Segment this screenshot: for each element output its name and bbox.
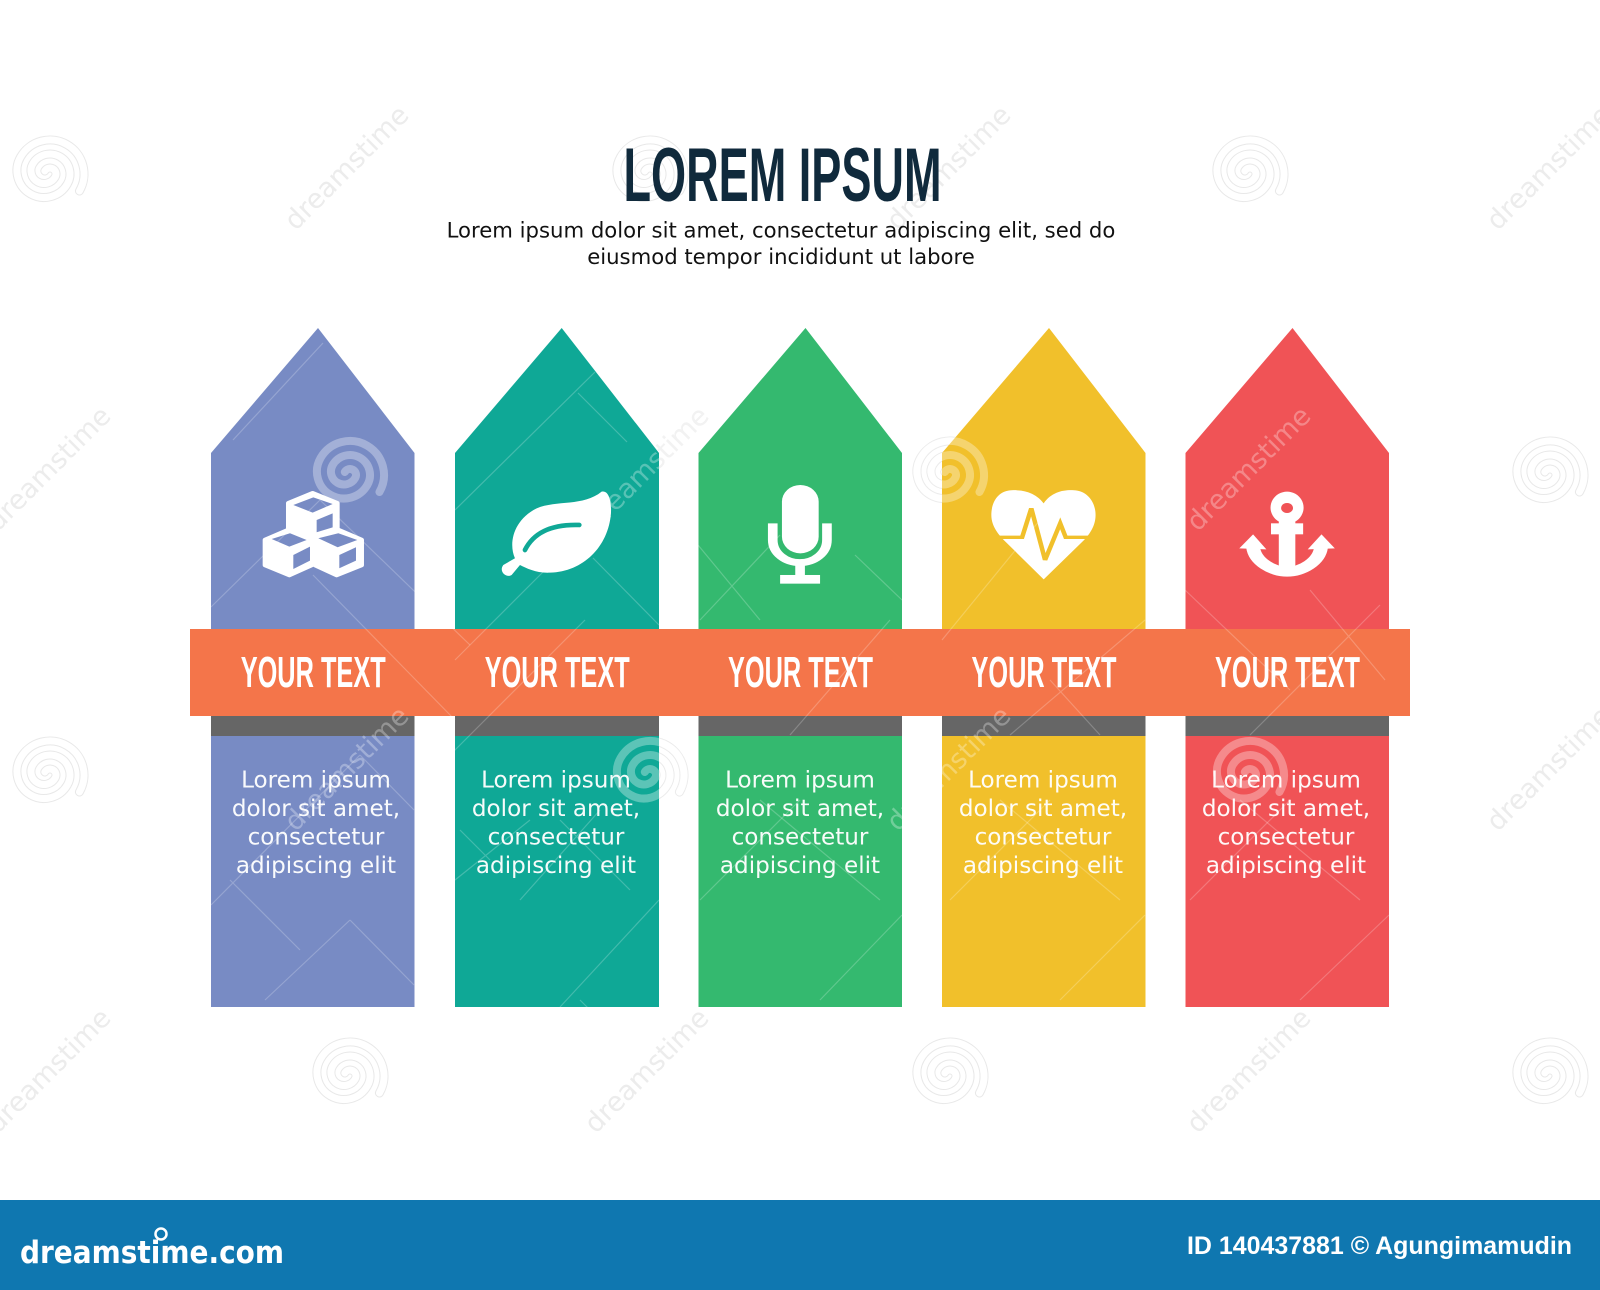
body text 3: consectetur — [732, 824, 869, 850]
banner label 3: YOUR TEXT — [728, 648, 873, 697]
body text 5: consectetur — [1218, 824, 1355, 850]
body text 3: dolor sit amet, — [716, 796, 884, 822]
footer logo: dreamstime.com — [20, 1235, 284, 1271]
watermark text on background: dreamstime — [881, 100, 1017, 236]
orange banner — [190, 629, 1410, 716]
panel: column 5 red — [1186, 328, 1389, 1007]
body text 4: Lorem ipsum — [968, 768, 1118, 794]
body text 3: adipiscing elit — [720, 853, 880, 879]
footer image id: ID 140437881 © Agungimamudin — [1187, 1232, 1572, 1260]
body text 1: dolor sit amet, — [232, 796, 400, 822]
watermark spirals on background — [7, 128, 1596, 1116]
body text 3: Lorem ipsum — [725, 768, 875, 794]
body text 2: dolor sit amet, — [472, 796, 640, 822]
banner label 1: YOUR TEXT — [241, 648, 386, 697]
icon: microphone — [773, 485, 827, 584]
banner label 2: YOUR TEXT — [485, 648, 630, 697]
watermark text on background: dreamstime — [579, 401, 715, 537]
body text 5: Lorem ipsum — [1211, 768, 1361, 794]
footer bar — [0, 1200, 1600, 1290]
body text 1: consectetur — [248, 824, 385, 850]
banner label 5: YOUR TEXT — [1215, 648, 1360, 697]
banner label 4: YOUR TEXT — [972, 648, 1117, 697]
body text 5: dolor sit amet, — [1202, 796, 1370, 822]
panel: column 2 teal — [455, 328, 659, 1007]
watermark text on background: dreamstime — [279, 100, 415, 236]
body text 5: adipiscing elit — [1206, 853, 1366, 879]
subtitle — [447, 218, 1115, 269]
watermark overlay on coloured panels: dreamstime — [1181, 401, 1317, 537]
body text 4: dolor sit amet, — [959, 796, 1127, 822]
watermark text on background: dreamstime — [579, 1003, 715, 1139]
watermark overlay on coloured panels: dreamstime — [881, 701, 1017, 837]
title: LOREM IPSUM — [624, 133, 942, 218]
watermark overlay on coloured panels: dreamstime — [579, 401, 715, 537]
watermark text on background: dreamstime — [1181, 1003, 1317, 1139]
body text 4: adipiscing elit — [963, 853, 1123, 879]
watermark overlay on coloured panels: dreamstime — [279, 701, 415, 837]
subtitle: Lorem ipsum dolor sit amet, consectetur adipiscing elit, sed do — [447, 218, 1115, 242]
icon: leaf — [502, 491, 611, 576]
body text 4: consectetur — [975, 824, 1112, 850]
panel: column 4 yellow — [942, 328, 1146, 1007]
body text 1: adipiscing elit — [236, 853, 396, 879]
icon: heart with pulse — [991, 490, 1096, 579]
subtitle: eiusmod tempor incididunt ut labore — [587, 244, 975, 269]
watermark overlay on coloured panels — [211, 343, 1389, 1020]
footer logo spiral — [156, 1228, 166, 1240]
body text 2: consectetur — [488, 824, 625, 850]
panel: column 1 purple — [211, 328, 414, 1007]
panel: column 3 green — [698, 328, 902, 1007]
icon: anchor — [1239, 492, 1335, 572]
body text 1: Lorem ipsum — [241, 768, 391, 794]
body text 2: adipiscing elit — [476, 853, 636, 879]
icon: cubes — [265, 493, 362, 575]
body text 2: Lorem ipsum — [481, 768, 631, 794]
